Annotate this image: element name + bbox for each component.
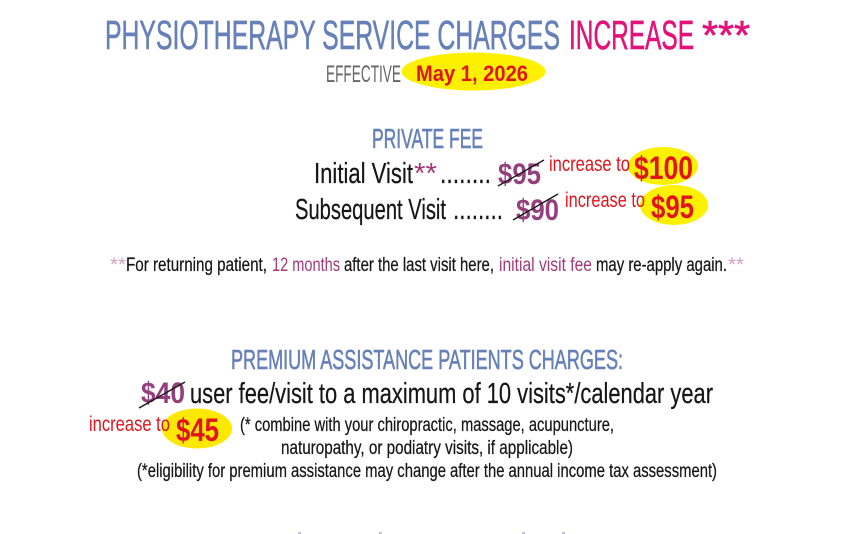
footnote: returning patient: after the last visit here, — [344, 255, 494, 276]
initial visit fee row: $100 — [634, 150, 693, 186]
heading: premium assistance: PREMIUM ASSISTANCE PATIENTS CHARGES: — [231, 344, 623, 375]
subsequent visit fee row: $90 — [516, 194, 559, 227]
heading: private fee: PRIVATE FEE — [372, 123, 483, 154]
premium user fee row: $40 — [141, 377, 185, 410]
subsequent visit fee row: increase to — [565, 189, 645, 212]
subsequent visit fee row: Subsequent Visit — [295, 194, 446, 226]
footnote: returning patient: ** — [728, 255, 745, 276]
effective date: EFFECTIVE — [326, 61, 401, 88]
premium increase to 45 — [89, 408, 232, 448]
premium notes — [137, 415, 717, 482]
initial visit fee row: ........ — [440, 158, 491, 190]
premium increase to 45: $45 — [176, 412, 219, 448]
footnote: returning patient: may re-apply again. — [596, 255, 727, 276]
subsequent visit fee row: ........ — [453, 194, 503, 226]
footnote: returning patient: 12 months — [272, 255, 340, 276]
subsequent visit fee row: $95 — [651, 189, 694, 225]
footnote: returning patient: initial visit fee — [499, 255, 592, 276]
effective date — [326, 52, 546, 90]
effective date: May 1, 2026 — [416, 61, 528, 86]
title: INCREASE — [569, 12, 694, 58]
footnote: returning patient — [110, 255, 745, 276]
initial visit fee row: $95 — [498, 158, 541, 191]
title: *** — [702, 12, 750, 58]
initial visit fee row — [314, 147, 698, 191]
footnote: returning patient: For returning patient, — [126, 255, 267, 276]
premium notes: naturopathy, or podiatry visits, if applicable) — [281, 438, 573, 459]
cropped text tops at bottom edge — [298, 532, 565, 534]
premium increase to 45: increase to — [89, 413, 170, 436]
subsequent visit fee row — [295, 185, 708, 227]
initial visit fee row: ** — [414, 158, 437, 190]
premium notes: (* combine with your chiropractic, massage, acupuncture, — [240, 415, 614, 436]
initial visit fee row: increase to — [549, 153, 630, 176]
initial visit fee row: Initial Visit — [314, 158, 413, 190]
title: PHYSIOTHERAPY SERVICE CHARGES — [105, 12, 560, 58]
footnote: returning patient: ** — [110, 255, 127, 276]
